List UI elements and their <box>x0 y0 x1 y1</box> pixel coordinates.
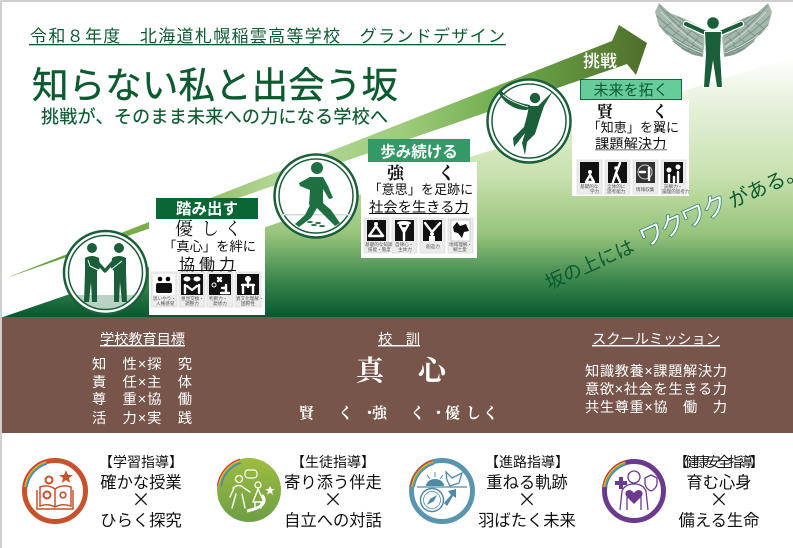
school mission <box>585 331 727 416</box>
tile: 多様性: 技能・態度 <box>368 246 391 253</box>
guidance text: 重ねる軌跡 <box>486 474 568 492</box>
guidance text <box>674 454 764 530</box>
guidance text: × <box>517 485 537 512</box>
main title: 知らない私と出会う坂 <box>32 65 398 106</box>
virtue: 強く <box>387 164 455 183</box>
school motto: 賢 <box>299 404 316 422</box>
school goals: 学校教育目標 <box>100 331 185 348</box>
tile: 地域理解 <box>448 218 473 253</box>
skill: 協働力: 協 働 力 <box>179 256 235 274</box>
guidance text: 育む心身 <box>686 474 752 492</box>
school motto: ・ <box>362 406 377 422</box>
virtue: 賢く: く <box>652 103 668 121</box>
icon: compass and dove <box>410 460 472 522</box>
virtue: 賢く: 賢 <box>597 102 615 121</box>
subtitle: 挑戦が、そのまま未来への力になる学校へ <box>41 107 388 127</box>
tile: 全体的に思考能力: 全体的に <box>607 183 626 190</box>
virtue: 強く: 強 <box>387 164 406 183</box>
tile: 基礎的な学力: 学力 <box>590 188 600 195</box>
school goals: 活 力×実 践 <box>92 410 192 427</box>
school mission: スクールミッション <box>592 331 720 348</box>
guidance text: 【進路指導】 <box>485 454 569 470</box>
guidance text <box>478 454 576 530</box>
tile: 読解力: 論理的思考力 <box>662 188 690 195</box>
school motto: く <box>338 405 353 422</box>
school motto: 校 訓 <box>378 331 420 348</box>
guidance text: ひらく探究 <box>100 512 182 530</box>
guidance text <box>99 454 183 530</box>
tile: 意見交換: 調整力 <box>185 300 199 307</box>
tile: 地域理解: 地域理解・ <box>449 241 472 248</box>
tile: 基礎的な学力 <box>577 160 602 195</box>
panel: 進路指導 <box>410 454 576 530</box>
panel: 未来を拓く <box>572 80 690 196</box>
tile: 自律心 <box>392 218 417 253</box>
tile: 判断力: 発想力 <box>213 300 227 307</box>
icon: handshake circle <box>64 231 147 314</box>
guidance text: × <box>709 485 729 512</box>
tile: 基礎的な学力: 基礎的な <box>580 183 599 190</box>
arrow: challenge slope <box>6 25 647 278</box>
step heading: 未来を拓く <box>593 82 669 99</box>
school motto: 真 <box>356 355 387 387</box>
school goals: 尊 重×協 働 <box>92 391 192 408</box>
tile: 地域理解: 郷土愛 <box>453 246 467 253</box>
school goals: 責 任×主 体 <box>92 374 192 391</box>
guidance text: × <box>323 485 343 512</box>
slanted slogan: 坂の上には <box>542 236 638 295</box>
tile: 自律心: 主体力 <box>398 246 412 253</box>
school motto <box>299 331 498 422</box>
school motto: く <box>410 405 425 422</box>
tile: 異文化理解 <box>235 272 264 307</box>
arrow label: 挑戦: 挑戦 <box>583 51 617 71</box>
panel: brown band <box>2 317 793 433</box>
tile: 自律心: 自律心・ <box>395 241 413 248</box>
guidance text: 確かな授業 <box>100 474 182 492</box>
school motto: 心 <box>418 355 450 387</box>
virtue: 優しく: く <box>224 219 242 239</box>
school goals <box>92 331 192 427</box>
guidance text: × <box>131 485 151 512</box>
tile: 全体的に思考能力 <box>605 160 630 195</box>
icon: walking together <box>218 459 278 520</box>
panel: 健康安全指導 <box>603 454 764 530</box>
tile: 多様性 <box>364 218 393 253</box>
phrase: 知恵: 「知恵」を翼に <box>588 119 679 135</box>
tile: 意見交換: 意見交換・ <box>181 295 204 302</box>
tile: 多様性: 基礎的な知識 <box>365 241 393 248</box>
tile: 思いやり <box>151 272 177 307</box>
tile: 思いやり: 思いやり・ <box>153 295 176 302</box>
guidance text: 寄り添う伴走 <box>284 474 382 492</box>
header line: 令和８年度 北海道札幌稲雲高等学校 グランドデザイン <box>30 26 505 46</box>
tile: 異文化理解: 国際性 <box>241 300 255 307</box>
phrase: 意思: 「意思」を足跡に <box>368 182 473 197</box>
slanted slogan <box>540 156 793 295</box>
phrase: 真心: 「真心」を絆に <box>163 239 256 254</box>
panel: 生徒指導 <box>218 454 382 530</box>
panel: 踏み出す <box>149 198 265 315</box>
school goals: 知 性×探 究 <box>92 356 192 373</box>
step heading: 踏み出す <box>176 200 238 218</box>
tile: 思いやり: 人権感覚 <box>156 300 175 307</box>
guidance text: 【健康安全指導】 <box>674 454 764 470</box>
school mission: 意欲×社会を生きる力 <box>585 381 727 398</box>
tile: 読解力: 読解力・ <box>664 183 682 190</box>
virtue: 優しく <box>175 219 242 239</box>
virtue: 優しく: 優 <box>175 219 193 239</box>
tile: 意見交換 <box>179 272 205 307</box>
panel: 歩み続ける <box>361 139 477 258</box>
school mission: 共生尊重×協 働 力 <box>585 399 727 416</box>
icon: body and heart <box>603 461 664 520</box>
icon: walking circle <box>274 154 358 238</box>
guidance text <box>284 454 382 530</box>
skill: 社会を生きる力: 社会を生きる力 <box>369 199 469 216</box>
school motto: 優 <box>445 404 460 422</box>
school mission: 知識教養×課題解決力 <box>585 362 727 380</box>
icon: open book <box>24 460 86 522</box>
panel: 学習指導 <box>24 454 183 530</box>
tile: 創造力: 創造力 <box>426 243 440 250</box>
tile: 読解力 <box>661 160 690 195</box>
school motto: く <box>483 405 498 422</box>
icon: flying circle <box>488 80 570 162</box>
skill: 課題解決力: 課題解決力 <box>595 136 666 153</box>
tile: 判断力: 判断力・ <box>209 295 227 302</box>
tile: 判断力 <box>207 272 233 307</box>
slope hill <box>3 57 793 317</box>
guidance text: 備える生命 <box>679 512 760 530</box>
guidance text: 自立への対話 <box>284 512 382 530</box>
guidance text: 【学習指導】 <box>99 454 183 470</box>
slanted slogan: ワクワク <box>635 189 732 253</box>
virtue: 優しく: し <box>201 219 219 239</box>
virtue: 強く: く <box>438 164 455 183</box>
school motto: 強 <box>372 405 388 422</box>
step heading: 歩み続ける <box>380 143 458 161</box>
tile: 全体的に思考能力: 思考能力 <box>607 188 626 195</box>
tile: 異文化理解: 異文化理解・ <box>236 295 264 302</box>
tile: 情報収集: 情報収集 <box>636 186 655 193</box>
guidance text: 羽ばたく未来 <box>478 512 576 530</box>
school motto: し <box>466 406 481 422</box>
icon: winged figure <box>655 3 772 87</box>
school motto: ・ <box>431 406 446 422</box>
virtue: 賢く <box>597 102 668 121</box>
guidance text: 【生徒指導】 <box>291 454 375 470</box>
